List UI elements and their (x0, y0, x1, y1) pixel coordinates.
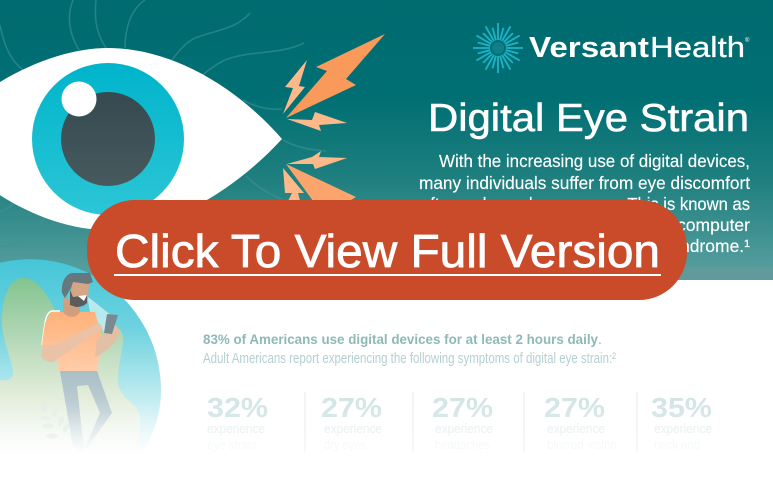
iris (32, 63, 184, 215)
left arm (41, 323, 103, 362)
intro text: many individuals suffer from eye discomfort (419, 173, 750, 193)
stat: 27% dry eyes (321, 392, 382, 452)
decorative eyelash lines (0, 0, 326, 247)
legs (60, 371, 112, 453)
intro text: With the increasing use of digital devices, (439, 151, 750, 171)
highlight (62, 82, 96, 116)
button: click to view full version: Click To View Full Version (115, 225, 660, 277)
background circle (0, 259, 161, 456)
stat: 27% dry eyes: dry eyes (324, 438, 366, 452)
stat: 27% dry eyes: 27% (321, 392, 382, 423)
stat: 27% dry eyes: experience (324, 422, 382, 436)
illustration: man with phone (0, 259, 161, 456)
neck (63, 298, 80, 317)
stat: 35% neck and (651, 392, 712, 452)
starburst centre (492, 42, 504, 54)
button: click to view full version (87, 200, 687, 300)
bottom fade (0, 400, 773, 500)
icon: eye (0, 48, 282, 230)
stat: 27% blurred vision: 27% (544, 392, 605, 423)
intro text: digital eye strain or computer (525, 215, 750, 235)
icon: lightning bolts (283, 34, 385, 205)
darker strip at header bottom (680, 267, 773, 280)
statistic heading: Adult Americans report experiencing the following symptoms of digital eye strain:² (203, 350, 616, 367)
statistic heading (203, 331, 616, 367)
intro text: vision syndrome.¹ (613, 236, 750, 256)
stat: 27% headaches: experience (435, 422, 493, 436)
stat: 35% neck and: 35% (651, 392, 712, 423)
intro text: after prolonged screen use. This is known as (421, 194, 750, 214)
stat: 27% blurred vision (544, 392, 617, 452)
wordmark: Versant (529, 32, 649, 64)
green blob (0, 278, 140, 454)
logo: Versant Health (473, 23, 750, 73)
statistic heading: . (598, 331, 602, 347)
hair (62, 273, 93, 298)
face (72, 280, 89, 300)
light beam (87, 296, 112, 335)
stat: 32% eye strain: 32% (207, 392, 268, 423)
intro text (419, 151, 750, 256)
shirt (42, 312, 102, 371)
stat: 27% blurred vision: blurred vision (547, 438, 617, 452)
shirt outline (42, 311, 60, 345)
plant (39, 402, 71, 438)
beard (70, 290, 87, 307)
dividers (305, 392, 637, 452)
title: Digital Eye Strain (428, 97, 749, 140)
stat: 27% headaches: headaches (435, 438, 490, 452)
stat: 27% headaches: 27% (432, 392, 493, 423)
eye white (0, 48, 282, 230)
stat: 27% headaches (432, 392, 493, 452)
logo: Versant Health: ® (745, 37, 750, 44)
stat: 35% neck and: experience (654, 422, 712, 436)
stat: 27% blurred vision: experience (547, 422, 605, 436)
stat: 32% eye strain: eye strain (207, 438, 257, 452)
icon: starburst (473, 23, 523, 73)
pupil (61, 92, 155, 186)
teeth (78, 295, 87, 301)
right arm (95, 322, 120, 357)
header background (0, 0, 773, 280)
stat: 32% eye strain: experience (207, 422, 265, 436)
stat: 35% neck and: neck and (654, 438, 700, 452)
statistic heading: 83% of Americans use digital devices for at least 2 hours daily (203, 331, 598, 347)
logo: Versant Health: Health (650, 32, 745, 64)
phone (104, 314, 118, 334)
stat: 32% eye strain (207, 392, 268, 452)
